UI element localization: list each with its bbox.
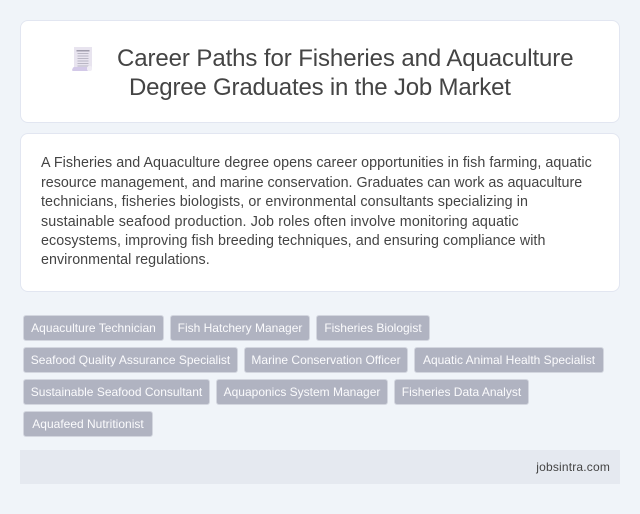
text block: description: [41, 155, 592, 268]
text block: description: resource management, and marine conservation. Graduates can work as aquaculture: [41, 175, 582, 191]
tag: Aquafeed Nutritionist: [32, 417, 144, 431]
tag: [170, 315, 310, 341]
panel: title card: [20, 20, 620, 123]
footer bar: [20, 450, 620, 484]
title: Degree Graduates in the Job Market: [129, 74, 511, 101]
tag: Aquaponics System Manager: [224, 385, 380, 399]
tag: Sustainable Seafood Consultant: [31, 385, 202, 399]
tag: [23, 347, 238, 373]
panel: description card: [20, 133, 620, 292]
tag: [244, 347, 408, 373]
tag: [216, 379, 388, 405]
tag: [394, 379, 529, 405]
career tags: [23, 315, 604, 437]
tag: [23, 315, 164, 341]
text block: description: technicians, fisheries biologists, or environmental consultants specializing in: [41, 194, 528, 210]
text block: description: environmental regulations.: [41, 252, 210, 268]
tag: Fish Hatchery Manager: [178, 321, 302, 335]
tag: Marine Conservation Officer: [251, 353, 401, 367]
tag: Seafood Quality Assurance Specialist: [31, 353, 230, 367]
tag: Fisheries Data Analyst: [402, 385, 521, 399]
tag: [414, 347, 604, 373]
text block: description: ecosystems, improving fish breeding techniques, and ensuring compliance with: [41, 233, 545, 249]
tag: Fisheries Biologist: [324, 321, 422, 335]
tag: Aquatic Animal Health Specialist: [423, 353, 595, 367]
icon: document scroll: [72, 47, 92, 71]
text block: description: sustainable seafood production. Job roles often involve monitoring aquatic: [41, 214, 519, 230]
tag: [23, 379, 210, 405]
tag: [316, 315, 430, 341]
tag: [23, 411, 153, 437]
tag: Aquaculture Technician: [31, 321, 156, 335]
footer source text: jobsintra.com: [536, 460, 610, 474]
text block: description: A Fisheries and Aquaculture degree opens career opportunities in fish farming, aquatic: [41, 155, 592, 171]
title: Career Paths for Fisheries and Aquaculture: [117, 45, 573, 72]
title: [117, 45, 573, 101]
